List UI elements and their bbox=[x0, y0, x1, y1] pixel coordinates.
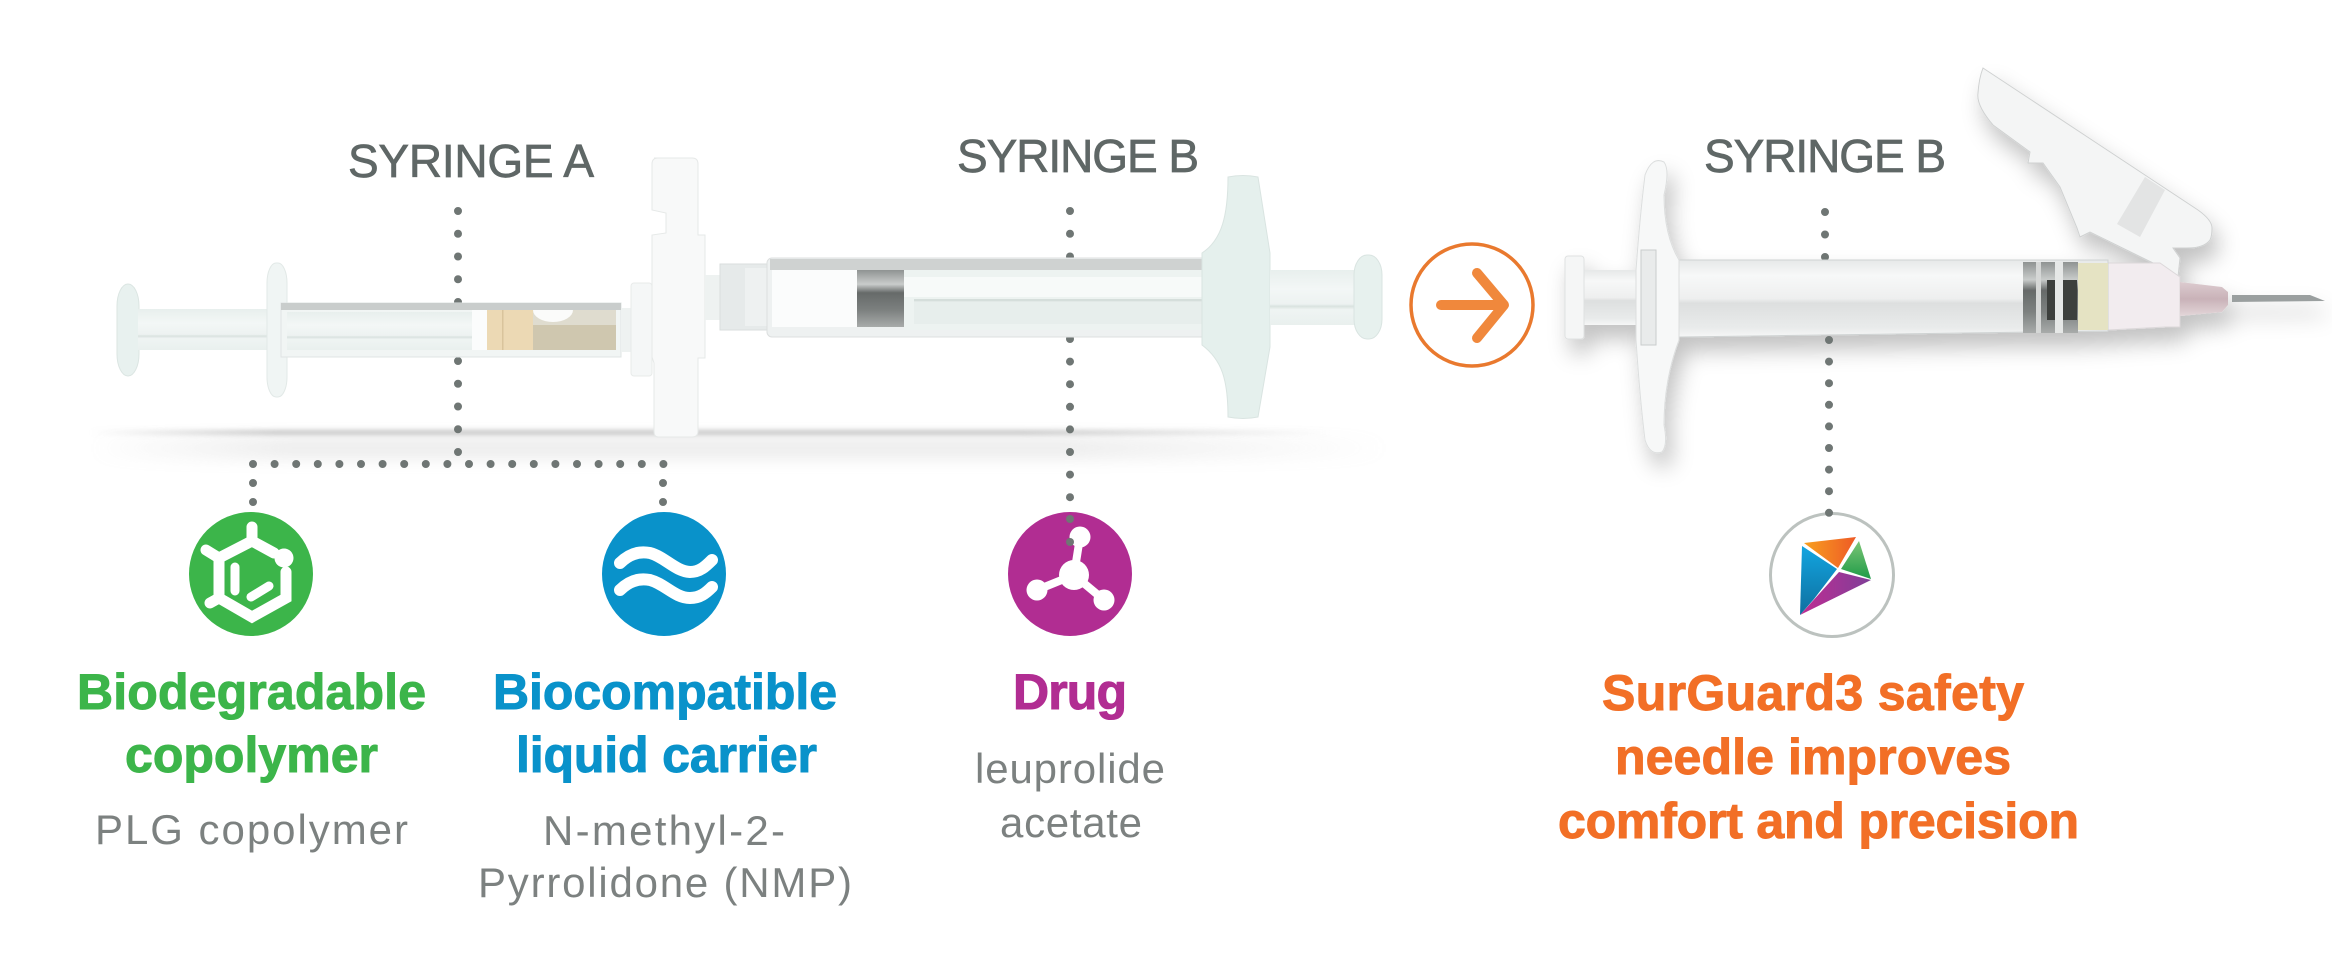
icon: biodegradable copolymer bbox=[189, 512, 313, 636]
arrow button bbox=[1411, 244, 1533, 366]
plunger cap bbox=[1565, 256, 1584, 339]
luer coupling between syringes bbox=[631, 158, 767, 437]
syringe B plunger rod bbox=[1270, 270, 1355, 325]
needle hub bbox=[2108, 263, 2180, 330]
grey stopper bbox=[2023, 262, 2078, 333]
plunger rod bbox=[1584, 270, 1644, 325]
dotted leader, upper bbox=[1821, 212, 1829, 258]
syringe A rear flange bbox=[267, 263, 287, 397]
syringe A bbox=[117, 263, 632, 397]
text block: biocompatible liquid carrier: liquid carrier bbox=[516, 727, 817, 783]
text block: biodegradable copolymer: copolymer bbox=[125, 727, 378, 783]
text block: drug bbox=[975, 664, 1165, 846]
text block: biocompatible liquid carrier: N-methyl-2- bbox=[543, 807, 785, 854]
guard shaded band bbox=[2117, 177, 2165, 237]
text block: SurGuard3 safety needle: comfort and precision bbox=[1558, 793, 2079, 849]
syringe A plunger cap bbox=[117, 284, 139, 376]
label: syringe B with needle: SYRINGE B bbox=[1704, 130, 1946, 182]
text block: SurGuard3 safety needle: SurGuard3 safety bbox=[1602, 665, 2024, 721]
needle bbox=[2232, 295, 2325, 302]
text block: drug: acetate bbox=[1000, 799, 1142, 846]
syringe B barrel bbox=[767, 258, 1209, 337]
icon: drug molecule bbox=[1008, 512, 1132, 636]
syringe B finger flange bbox=[1202, 176, 1270, 418]
text block: biocompatible liquid carrier: Pyrrolidone (NMP) bbox=[478, 859, 852, 906]
syringe B bbox=[767, 176, 1382, 499]
text block: SurGuard3 safety needle bbox=[1558, 665, 2079, 849]
text block: drug: leuprolide bbox=[975, 745, 1165, 792]
text block: biodegradable copolymer: Biodegradable bbox=[77, 664, 426, 720]
text block: SurGuard3 safety needle: needle improves bbox=[1615, 729, 2011, 785]
text block: biodegradable copolymer bbox=[77, 664, 426, 853]
text block: biodegradable copolymer: PLG copolymer bbox=[95, 806, 408, 853]
icon: biocompatible liquid carrier bbox=[602, 512, 726, 636]
safety guard bbox=[1978, 68, 2212, 277]
text block: biocompatible liquid carrier: Biocompatible bbox=[493, 664, 837, 720]
label: syringe B: SYRINGE B bbox=[957, 130, 1199, 182]
text block: drug: Drug bbox=[1013, 664, 1127, 720]
dotted leader: syringe A to copolymer and carrier bbox=[253, 211, 665, 503]
floor shadow bbox=[90, 430, 1390, 460]
assembled syringe bbox=[1565, 68, 2325, 453]
icon: SurGuard logo bbox=[1770, 340, 1894, 636]
syringe B with safety needle bbox=[1565, 68, 2325, 453]
syringe A plunger rod bbox=[138, 309, 268, 350]
dotted leader behind syringe B bbox=[1066, 211, 1074, 499]
text block: biocompatible liquid carrier bbox=[478, 664, 852, 906]
drug section bbox=[2078, 263, 2108, 330]
syringe B plunger cap bbox=[1354, 255, 1382, 339]
barrel bbox=[1679, 260, 2108, 337]
label: syringe A: SYRINGE A bbox=[348, 135, 594, 187]
syringe A barrel bbox=[281, 303, 621, 357]
finger flange bbox=[1636, 161, 1679, 453]
syringe A tip bbox=[621, 308, 632, 352]
